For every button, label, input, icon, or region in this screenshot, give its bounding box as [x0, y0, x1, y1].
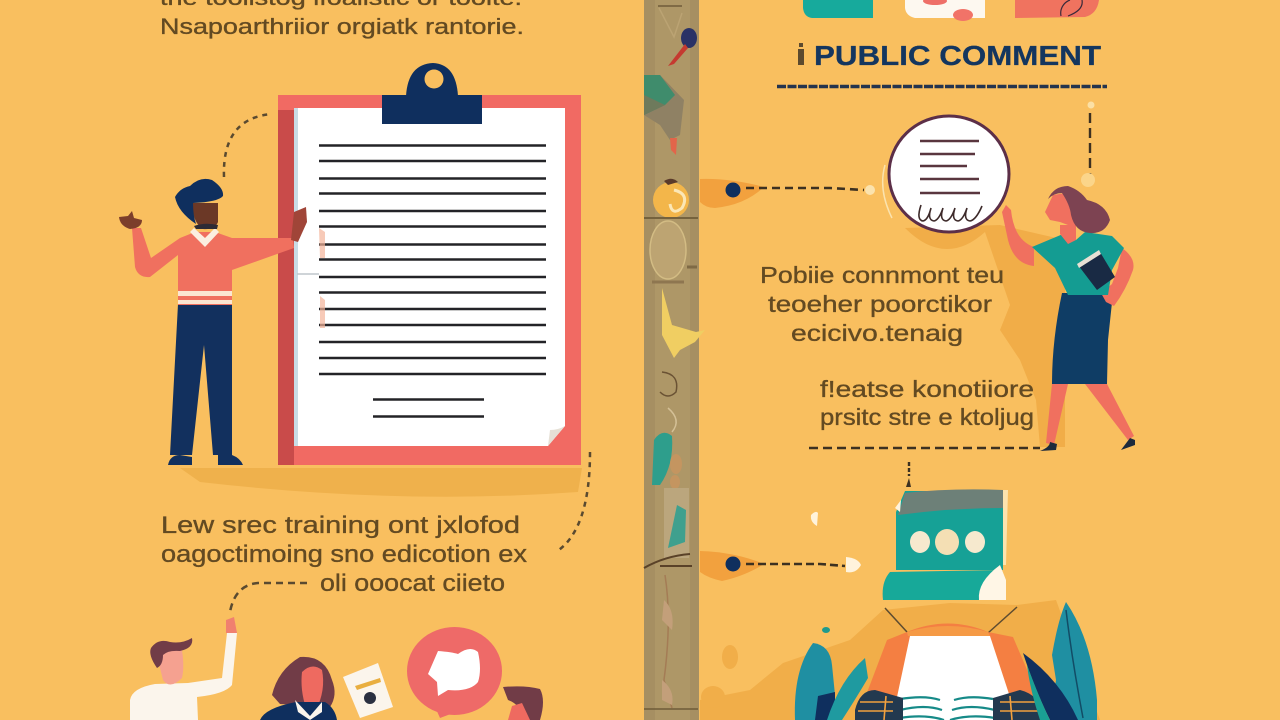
person: woman with tablet — [1002, 186, 1135, 451]
small striped leaves — [855, 690, 903, 720]
dashed connector: down to chat icon — [906, 462, 911, 487]
icon: coral tile with ring — [1015, 0, 1099, 18]
connector bullet 2 — [700, 551, 861, 581]
right text block 1: teoeher poorctikor — [768, 291, 992, 317]
shadow behind round paper and woman — [905, 225, 1065, 447]
speech bubble — [407, 627, 502, 718]
teal shirt — [1032, 232, 1124, 295]
connector bullet 1 — [700, 179, 875, 208]
left text block top — [160, 0, 524, 39]
woman with document — [260, 657, 393, 720]
hands — [119, 211, 142, 229]
right text block 1: ecicivo.tenaig — [791, 320, 963, 346]
round paper with comment lines — [883, 116, 1009, 232]
right text block 1 — [760, 262, 1004, 346]
head — [1045, 192, 1076, 228]
tablet — [1078, 252, 1115, 290]
dotted connector: text to raised hand — [230, 583, 307, 612]
legs — [1046, 384, 1068, 445]
chat icon teal book — [811, 489, 1008, 600]
third person head — [503, 686, 543, 720]
document text lines — [319, 146, 546, 416]
pages stripes — [900, 697, 995, 720]
right text block 1: Pobiie connmont teu — [760, 262, 1004, 288]
right text block 2: f!eatse konotiiore — [820, 376, 1034, 402]
dashed connector: horizontal under text — [809, 447, 1040, 449]
person with raised arm — [130, 617, 237, 720]
left text block middle: Lew srec training ont jxlofod — [161, 512, 520, 539]
left text block middle: oagoctimoing sno edicotion ex — [161, 541, 527, 568]
decorative central timeline strip — [644, 0, 705, 720]
open book with leaves — [700, 600, 1100, 720]
torso — [132, 228, 294, 305]
leaves left — [795, 643, 835, 720]
decorative blobs — [701, 627, 830, 708]
left text block top: Nsapoarthriior orgiatk rantorie. — [160, 14, 524, 39]
dotted connector: presenter to clipboard — [224, 114, 272, 177]
collar — [190, 228, 219, 247]
icon: white tile with pink blob — [905, 0, 985, 18]
icon: teal tile — [803, 0, 873, 18]
heading: public comment: PUBLIC COMMENT — [814, 40, 1101, 71]
dashed connector: vertical — [1081, 102, 1095, 187]
clipboard clip — [382, 63, 482, 124]
shadow — [700, 600, 1100, 720]
dotted connector: clipboard corner — [556, 452, 590, 552]
clipboard with document — [180, 63, 582, 497]
legs — [170, 304, 232, 455]
right text block 2: prsitc stre e ktoljug — [820, 404, 1034, 430]
left text block middle — [161, 512, 527, 597]
person: presenter — [119, 179, 307, 465]
top icons row — [803, 0, 1099, 21]
heading: public comment — [777, 40, 1107, 86]
left text block middle: oli ooocat ciieto — [320, 570, 505, 597]
skirt — [1052, 293, 1113, 384]
arm — [1002, 205, 1034, 266]
head — [193, 203, 218, 229]
people group bottom left — [130, 617, 543, 720]
right text block 2 — [820, 376, 1034, 430]
leaves right — [1050, 602, 1097, 720]
book body — [860, 624, 1045, 720]
